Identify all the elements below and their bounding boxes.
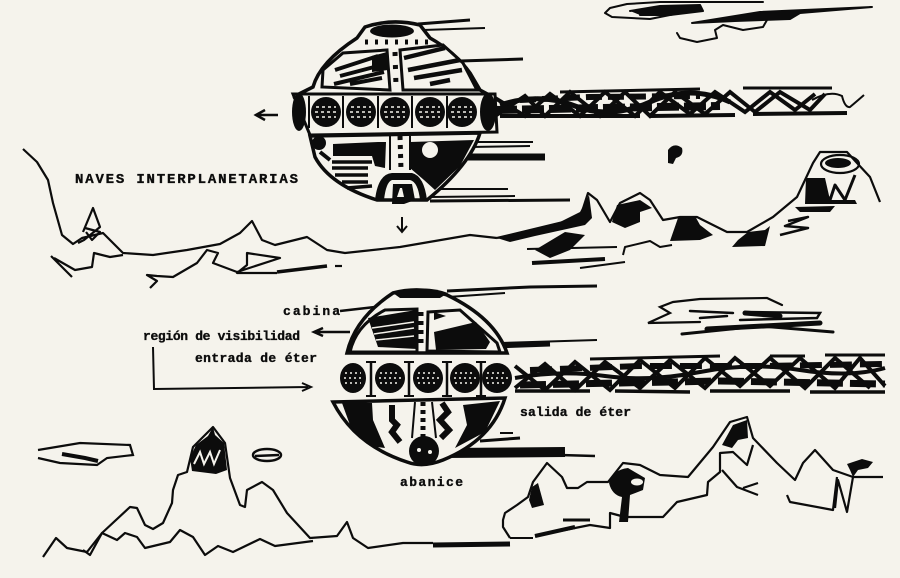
right lower peak shading [722, 420, 748, 448]
ship 1 porthole band [292, 93, 497, 135]
arrow: visibilidad [314, 328, 350, 336]
arrow: cabina [340, 307, 375, 311]
top right cloud [605, 2, 872, 42]
ship 1 central rivet strip [395, 52, 396, 86]
label: cabina: cabina [283, 304, 340, 319]
upper landscape right [497, 152, 880, 268]
heading: naves interplanetarias: NAVES INTERPLANETARIAS [75, 172, 298, 188]
ship 2 rivets [418, 312, 424, 345]
ship 1 left window [322, 50, 390, 90]
lower shore stroke [433, 544, 510, 545]
ship 2 speed lines [445, 286, 597, 456]
ship 1 lower hull [310, 133, 480, 204]
lower landscape right [503, 417, 883, 538]
ship 1 engine arch [375, 173, 427, 200]
ship 2 top hatch [393, 288, 448, 298]
label: region de visibilidad: región de visibilidad [143, 329, 300, 344]
ship 2 fan [409, 436, 439, 466]
ship 2 exhaust coil [515, 355, 885, 392]
cloud right mid [648, 298, 833, 334]
cap highlights [194, 450, 220, 464]
ship 1 top hatch [370, 24, 414, 38]
small cloud ring [253, 449, 281, 461]
ship 2 portholes [340, 362, 512, 396]
small left peak [529, 483, 544, 508]
left cloud [38, 443, 133, 465]
ship 2 lower hull [333, 398, 505, 466]
lower mountain cap [190, 427, 227, 474]
arrow: down [397, 217, 407, 232]
arrow: entrada path [153, 347, 311, 391]
ship 2 body [333, 288, 512, 466]
arrow: ship 1 direction [256, 110, 278, 120]
palm tree top [847, 459, 873, 477]
label: entrada de eter: entrada de éter [195, 351, 317, 366]
lower landscape left [43, 427, 433, 557]
label: abanico: abanice [400, 475, 463, 490]
ship 1 right window [400, 45, 477, 90]
ship 1 body [292, 22, 497, 204]
ship 1 top rivets [365, 40, 432, 44]
upper landscape shading [497, 178, 857, 258]
ship 1 exhaust coil [495, 88, 864, 116]
ship 1 speed lines [418, 20, 570, 201]
icon: small planet [668, 145, 682, 164]
ship 2 dome [347, 290, 507, 353]
ship 2 left window [350, 309, 417, 352]
label: salida de eter: salida de éter [520, 405, 631, 420]
small figure [609, 468, 645, 522]
ship 2 right window [427, 310, 500, 352]
ship 1 upper hull [293, 22, 493, 97]
upper landscape left [23, 149, 497, 288]
